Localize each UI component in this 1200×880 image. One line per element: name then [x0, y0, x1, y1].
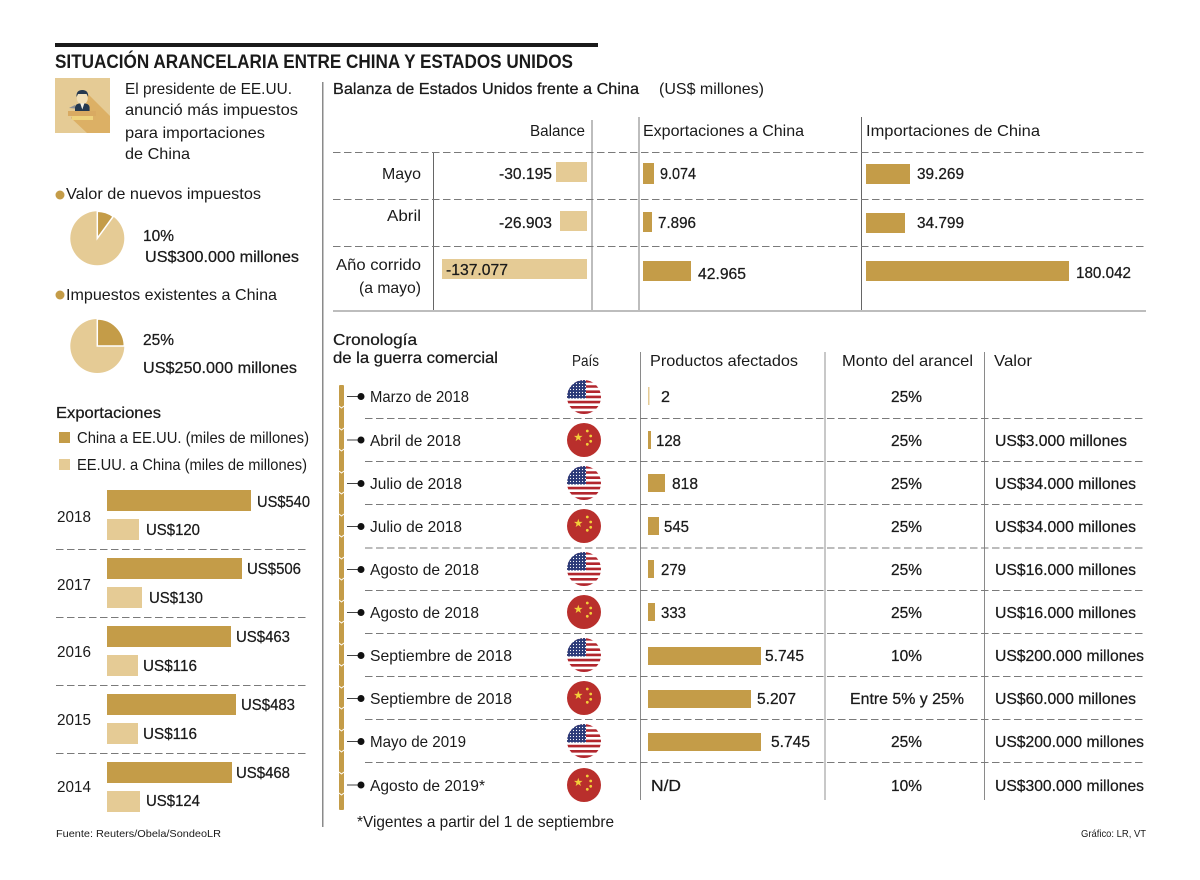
row: agosto 2018 EE.UU.: 279 — [661, 562, 686, 579]
title: SITUACIÓN ARANCELARIA ENTRE CHINA Y ESTADOS UNIDOS — [55, 51, 573, 73]
row: agosto 2018 EE.UU. — [370, 552, 1136, 586]
row: agosto 2018 EE.UU.: Agosto de 2018 — [370, 562, 479, 579]
row: septiembre 2018 China: US$60.000 millones — [995, 691, 1136, 708]
row: septiembre 2018 China: Septiembre de 2018 — [370, 691, 512, 708]
pie chart: 25% — [70, 319, 124, 373]
column headers: Importaciones de China — [866, 123, 1040, 140]
pie 1 values: 10% — [143, 228, 174, 245]
pie 2 values: US$250.000 millones — [143, 360, 297, 377]
row: julio 2018 EE.UU.: 818 — [672, 476, 698, 493]
heading: balanza: Balanza de Estados Unidos frente a China — [333, 81, 639, 98]
column headers — [530, 123, 1040, 140]
column headers: Monto del arancel — [842, 353, 973, 370]
legend: China a EE.UU. (miles de millones) — [77, 430, 309, 447]
year 2015 — [57, 694, 295, 744]
row labels — [336, 166, 421, 297]
panel: left column summary — [55, 78, 299, 377]
row: septiembre 2018 EE.UU.: US$200.000 millones — [995, 648, 1144, 665]
column headers: País — [572, 353, 599, 370]
row: julio 2018 China — [370, 509, 1136, 543]
year 2018: US$120 — [146, 522, 200, 539]
icon: president at podium — [55, 78, 110, 133]
pie 2 values — [143, 332, 297, 377]
chart: balance bars: -26.903 — [499, 215, 552, 232]
year 2014: US$468 — [236, 765, 290, 782]
year 2018 — [57, 490, 310, 540]
row: septiembre 2018 China — [370, 681, 1136, 715]
column headers: Balance — [530, 123, 585, 140]
row: julio 2018 EE.UU. — [370, 466, 1136, 500]
column headers — [572, 353, 1033, 370]
chart: imports bars: 180.042 — [1076, 265, 1131, 282]
row: septiembre 2018 EE.UU.: 5.745 — [765, 648, 804, 665]
year 2015: US$116 — [143, 726, 197, 743]
year 2016: US$116 — [143, 658, 197, 675]
row: mayo 2019: 25% — [891, 734, 922, 751]
row: agosto 2019 — [370, 768, 1144, 802]
timeline — [339, 385, 364, 810]
row: mayo 2019: US$200.000 millones — [995, 734, 1144, 751]
panel: cronología — [333, 332, 1146, 831]
chart: balance bars — [442, 162, 587, 279]
row: septiembre 2018 China: 5.207 — [757, 691, 796, 708]
chart: exports bars: 7.896 — [658, 215, 696, 232]
row: marzo 2018: 25% — [891, 389, 922, 406]
year 2017: US$130 — [149, 590, 203, 607]
row: agosto 2018 China: Agosto de 2018 — [370, 605, 479, 622]
row: julio 2018 China: 25% — [891, 519, 922, 536]
row labels: Mayo — [382, 166, 421, 183]
row: mayo 2019: 5.745 — [771, 734, 810, 751]
heading: valor de nuevos impuestos: Valor de nuevos impuestos — [66, 186, 261, 203]
row: agosto 2018 EE.UU.: 25% — [891, 562, 922, 579]
row: abril 2018: 128 — [656, 433, 681, 450]
pie 1 values: US$300.000 millones — [145, 249, 299, 266]
bar chart: exports by year — [56, 490, 310, 812]
heading: balanza: (US$ millones) — [659, 81, 764, 98]
row: julio 2018 EE.UU.: 25% — [891, 476, 922, 493]
row: julio 2018 China: 545 — [664, 519, 689, 536]
row: agosto 2018 China: 333 — [661, 605, 686, 622]
year 2016 — [57, 626, 290, 676]
row: mayo 2019: Mayo de 2019 — [370, 734, 466, 751]
row: agosto 2018 China: US$16.000 millones — [995, 605, 1136, 622]
pie chart: 10% — [70, 211, 124, 265]
column headers: Exportaciones a China — [643, 123, 804, 140]
footnote: *Vigentes a partir del 1 de septiembre — [357, 814, 614, 831]
row: julio 2018 EE.UU.: Julio de 2018 — [370, 476, 462, 493]
row: agosto 2019: N/D — [651, 778, 681, 795]
year 2017: US$506 — [247, 561, 301, 578]
chart: imports bars: 39.269 — [917, 166, 964, 183]
year 2018: 2018 — [57, 509, 91, 526]
chart: imports bars: 34.799 — [917, 215, 964, 232]
legend — [59, 430, 309, 474]
year 2018: US$540 — [257, 494, 310, 511]
row: julio 2018 China: Julio de 2018 — [370, 519, 462, 536]
intro text — [125, 81, 298, 163]
chart: imports bars — [866, 164, 1131, 282]
year 2016: 2016 — [57, 644, 91, 661]
chart: balance bars: -30.195 — [499, 166, 552, 183]
pie 1 values — [143, 228, 299, 266]
intro text: El presidente de EE.UU. — [125, 81, 292, 98]
chart: exports bars — [643, 163, 746, 283]
row: abril 2018: 25% — [891, 433, 922, 450]
column headers: Valor — [994, 353, 1033, 370]
row: julio 2018 EE.UU.: US$34.000 millones — [995, 476, 1136, 493]
heading: balanza — [333, 81, 764, 98]
intro text: de China — [125, 146, 190, 163]
intro text: anunció más impuestos — [125, 102, 298, 119]
row: abril 2018: US$3.000 millones — [995, 433, 1127, 450]
chart: balance bars: -137.077 — [446, 262, 508, 279]
heading: impuestos existentes: Impuestos existentes a China — [66, 287, 277, 304]
credit: Gráfico: LR, VT — [1081, 828, 1147, 840]
heading: exportaciones: Exportaciones — [56, 405, 161, 422]
heading: cronología — [333, 332, 498, 367]
panel: exportaciones — [56, 405, 310, 812]
source: Fuente: Reuters/Obela/SondeoLR — [56, 828, 221, 840]
year 2016: US$463 — [236, 629, 290, 646]
title — [55, 43, 598, 73]
row labels: Abril — [387, 208, 421, 225]
year 2014: 2014 — [57, 779, 91, 796]
year 2015: 2015 — [57, 712, 91, 729]
year 2014: US$124 — [146, 793, 200, 810]
row: agosto 2018 China — [370, 595, 1136, 629]
intro text: para importaciones — [125, 125, 265, 142]
heading: cronología: Cronología — [333, 332, 417, 349]
chart: exports bars: 9.074 — [660, 166, 696, 183]
row: septiembre 2018 EE.UU. — [370, 638, 1144, 672]
row: abril 2018: Abril de 2018 — [370, 433, 461, 450]
row: marzo 2018 — [370, 380, 922, 414]
chart: exports bars: 42.965 — [698, 266, 746, 283]
row labels: Año corrido — [336, 257, 421, 274]
legend: EE.UU. a China (miles de millones) — [77, 457, 307, 474]
pie 2 values: 25% — [143, 332, 174, 349]
row: julio 2018 China: US$34.000 millones — [995, 519, 1136, 536]
column headers: Productos afectados — [650, 353, 798, 370]
row: marzo 2018: 2 — [661, 389, 670, 406]
panel: balanza — [333, 81, 1146, 312]
year 2017: 2017 — [57, 577, 91, 594]
row: agosto 2018 EE.UU.: US$16.000 millones — [995, 562, 1136, 579]
row: agosto 2019: Agosto de 2019* — [370, 778, 485, 795]
row: septiembre 2018 EE.UU.: 10% — [891, 648, 922, 665]
row labels: (a mayo) — [359, 280, 421, 297]
heading: cronología: de la guerra comercial — [333, 350, 498, 367]
year 2014 — [57, 762, 290, 812]
row: abril 2018 — [370, 423, 1127, 457]
row: marzo 2018: Marzo de 2018 — [370, 389, 469, 406]
row: agosto 2018 China: 25% — [891, 605, 922, 622]
row: mayo 2019 — [370, 724, 1144, 758]
year 2015: US$483 — [241, 697, 295, 714]
row: septiembre 2018 China: Entre 5% y 25% — [850, 691, 964, 708]
row: agosto 2019: US$300.000 millones — [995, 778, 1144, 795]
year 2017 — [57, 558, 301, 608]
row: septiembre 2018 EE.UU.: Septiembre de 2018 — [370, 648, 512, 665]
row: agosto 2019: 10% — [891, 778, 922, 795]
